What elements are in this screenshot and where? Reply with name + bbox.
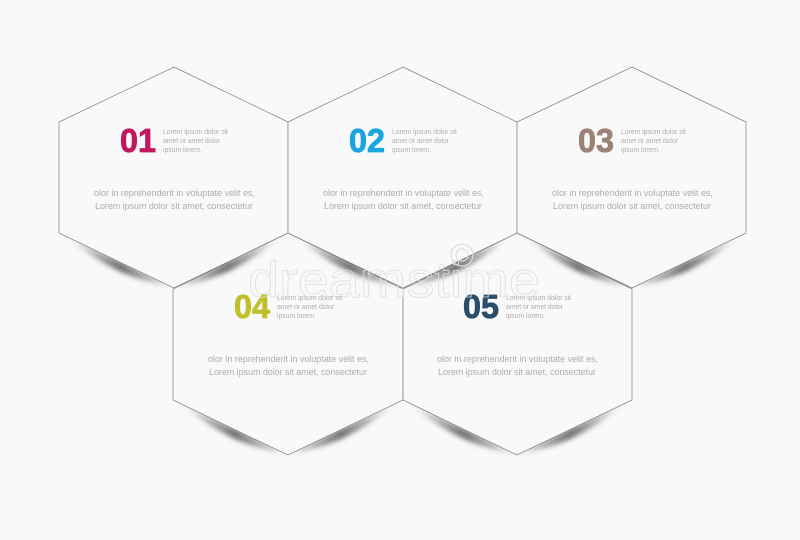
short text 04: ipsum lorem. bbox=[277, 313, 316, 320]
panel: hexagon 01 bbox=[59, 67, 288, 288]
content: hexagon 05 bbox=[437, 288, 598, 377]
body text 01: Lorem ipsum dolor sit amet, consectetur bbox=[95, 201, 253, 211]
short text 04: Lorem ipsum dolor sit bbox=[277, 295, 342, 302]
panel: hexagon 03 bbox=[517, 67, 746, 288]
body text 05: olor in reprehenderit in voluptate velit es, bbox=[437, 354, 598, 364]
short text 03: Lorem ipsum dolor sit bbox=[621, 129, 686, 136]
number 03: 03 bbox=[578, 122, 614, 159]
content: hexagon 04 bbox=[208, 288, 369, 377]
body text 02: Lorem ipsum dolor sit amet, consectetur bbox=[324, 201, 482, 211]
short text 05: ipsum lorem. bbox=[506, 313, 545, 320]
short text 05: Lorem ipsum dolor sit bbox=[506, 295, 571, 302]
body text 03: Lorem ipsum dolor sit amet, consectetur bbox=[553, 201, 711, 211]
body text 05: Lorem ipsum dolor sit amet, consectetur bbox=[438, 367, 596, 377]
number 02: 02 bbox=[349, 122, 385, 159]
short text 01: amet or amet dolor bbox=[163, 138, 221, 145]
body text 03: olor in reprehenderit in voluptate velit es, bbox=[552, 188, 713, 198]
number 05: 05 bbox=[463, 288, 499, 325]
watermark: dreamstime bbox=[248, 252, 540, 308]
short text 04: amet or amet dolor bbox=[277, 304, 335, 311]
panel: hexagon 04 bbox=[173, 233, 403, 455]
short text 02: Lorem ipsum dolor sit bbox=[392, 129, 457, 136]
short text 02: ipsum lorem. bbox=[392, 147, 431, 154]
short text 01: Lorem ipsum dolor sit bbox=[163, 129, 228, 136]
number 01: 01 bbox=[120, 122, 156, 159]
short text 03: amet or amet dolor bbox=[621, 138, 679, 145]
short text 01: ipsum lorem. bbox=[163, 147, 202, 154]
short text 02: amet or amet dolor bbox=[392, 138, 450, 145]
body text 01: olor in reprehenderit in voluptate velit es, bbox=[94, 188, 255, 198]
body text 04: olor in reprehenderit in voluptate velit es, bbox=[208, 354, 369, 364]
body text 02: olor in reprehenderit in voluptate velit es, bbox=[323, 188, 484, 198]
hexagon 04 shadow bbox=[182, 404, 394, 454]
number 04: 04 bbox=[234, 288, 271, 325]
hexagon 05 shadow bbox=[411, 404, 623, 454]
hexagon 03 shadow bbox=[526, 237, 738, 287]
panel: hexagon 05 bbox=[403, 233, 632, 455]
short text 05: amet or amet dolor bbox=[506, 304, 564, 311]
body text 04: Lorem ipsum dolor sit amet, consectetur bbox=[209, 367, 367, 377]
short text 03: ipsum lorem. bbox=[621, 147, 660, 154]
hexagon 01 shadow bbox=[68, 237, 280, 287]
panel: hexagon 02 bbox=[288, 67, 517, 288]
hexagon 02 shadow bbox=[297, 237, 509, 287]
